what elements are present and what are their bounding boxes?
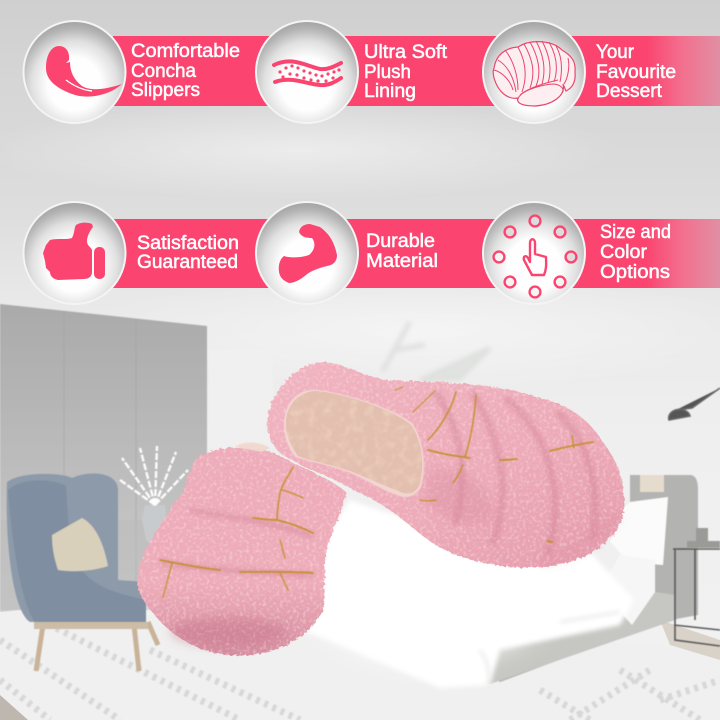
- text: Material: [366, 251, 438, 272]
- ridge shading: [160, 510, 313, 575]
- icon: concha bread: [493, 41, 575, 106]
- icon: thumbs up: [43, 223, 105, 280]
- text: Favourite: [596, 62, 676, 83]
- text: Satisfaction: [137, 233, 239, 254]
- icon disc: [24, 202, 126, 304]
- vase with flowers: [120, 446, 188, 548]
- feature: Ultra Soft Plush Lining: [256, 21, 448, 123]
- feature: Comfortable Concha Slippers: [24, 21, 240, 123]
- icon: feather: [46, 46, 122, 97]
- text: Comfortable: [131, 41, 240, 62]
- icon: pointing hand: [524, 239, 546, 275]
- feature bar: row 2: [113, 219, 720, 288]
- text: Color: [600, 242, 648, 263]
- icon disc: [483, 21, 585, 123]
- icon: lining layers: [274, 61, 341, 85]
- feature: Satisfaction Guaranteed: [24, 202, 239, 304]
- text: Options: [600, 262, 670, 283]
- sole: [284, 390, 424, 497]
- icon detail: feather swoosh: [66, 80, 92, 91]
- icon: colour option rings: [494, 216, 576, 297]
- text: Plush: [364, 62, 411, 83]
- text: Lining: [364, 81, 416, 102]
- white blanket: [290, 500, 634, 688]
- icon disc: [256, 21, 358, 123]
- text: Durable: [366, 231, 435, 252]
- slipper: back with visible sole: [267, 362, 624, 568]
- gold seams: [160, 467, 313, 598]
- feature: Your Favourite Dessert: [483, 21, 676, 123]
- icon: flexed arm: [279, 224, 337, 283]
- icon disc: [483, 202, 585, 304]
- wall plant: [382, 322, 490, 380]
- window: [209, 349, 273, 449]
- opening edge: [235, 443, 270, 452]
- slipper: front toe view: [138, 443, 347, 655]
- toe shading: [170, 617, 286, 647]
- shading and ridges: [425, 392, 615, 560]
- text: Dessert: [596, 81, 663, 102]
- feature bar: row 1: [113, 36, 720, 106]
- gold seams: [395, 387, 593, 542]
- rug and floor: [0, 612, 720, 720]
- text: Concha: [131, 61, 196, 82]
- bedside table: [673, 549, 720, 646]
- icon disc: [256, 202, 358, 304]
- text: Slippers: [131, 80, 200, 101]
- wardrobe: [0, 304, 207, 612]
- bed: [460, 475, 698, 684]
- feature: Durable Material: [256, 202, 438, 304]
- text: Your: [596, 42, 635, 63]
- text: Size and: [600, 222, 671, 243]
- wall lamp: [669, 388, 720, 420]
- icon disc: [24, 21, 126, 123]
- bedside items: [687, 528, 720, 548]
- text: Ultra Soft: [364, 42, 448, 63]
- feature: Size and Color Options: [483, 202, 671, 304]
- text: Guaranteed: [137, 252, 238, 273]
- armchair: [7, 474, 158, 671]
